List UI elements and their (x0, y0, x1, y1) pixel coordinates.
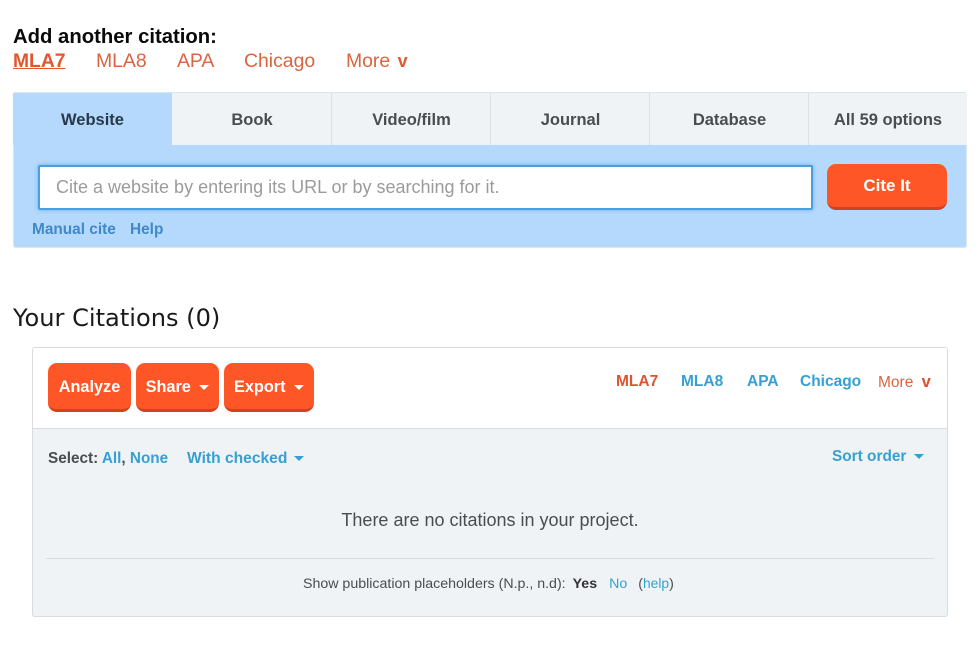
panel: citations list (32, 347, 948, 617)
tab: Website: Website (61, 111, 124, 129)
tab: Website (13, 93, 172, 145)
button: Analyze (48, 363, 131, 412)
button: Share: Share (146, 378, 191, 396)
tab: Journal: Journal (541, 111, 600, 129)
tab: Book: Book (231, 111, 273, 129)
heading: add another citation: Add another citation: (13, 26, 217, 48)
link: Manual cite: Manual cite (32, 221, 116, 238)
tab: Journal (490, 93, 650, 145)
toolbar (33, 348, 947, 429)
tab: Video/film (331, 93, 491, 145)
link: Chicago: Chicago (244, 50, 315, 72)
tab: Video/film: Video/film (372, 111, 451, 129)
link: Help: Help (130, 221, 163, 238)
tab: All 59 options: All 59 options (834, 111, 942, 129)
button: Cite It (827, 164, 947, 210)
tab: Database (649, 93, 809, 145)
dropdown: with checked: With checked (187, 450, 287, 467)
link: APA: APA (177, 50, 214, 72)
heading: your citations: Your Citations (0) (13, 304, 220, 332)
button: Export: Export (234, 378, 286, 396)
empty state message: There are no citations in your project. (341, 510, 639, 530)
link: MLA7: MLA7 (13, 51, 66, 72)
select controls: Select: All, None (48, 450, 168, 467)
citation style links (13, 50, 408, 72)
button: Cite It: Cite It (863, 176, 911, 195)
search input: Cite a website by entering its URL or by searching for it. (56, 177, 500, 197)
toolbar style: APA: APA (747, 373, 779, 390)
link: MLA8: MLA8 (96, 50, 147, 72)
divider (46, 558, 934, 559)
button: Share (136, 363, 219, 412)
link: More: More v (346, 50, 408, 72)
dropdown: sort order: Sort order (832, 448, 906, 465)
tab: All 59 options (808, 93, 967, 145)
panel: citation form (13, 92, 967, 248)
toolbar style: MLA8: MLA8 (681, 373, 723, 390)
tab: Book (172, 93, 332, 145)
toolbar style: MLA7: MLA7 (616, 373, 658, 390)
publication placeholders option: Show publication placeholders (N.p., n.d): Yes No (help) (303, 576, 674, 592)
search input (38, 165, 813, 210)
tab: Database: Database (693, 111, 766, 129)
button: Export (224, 363, 314, 412)
toolbar style: Chicago: Chicago (800, 373, 861, 390)
button: Analyze: Analyze (59, 378, 120, 396)
toolbar style: More: More v (878, 373, 931, 391)
